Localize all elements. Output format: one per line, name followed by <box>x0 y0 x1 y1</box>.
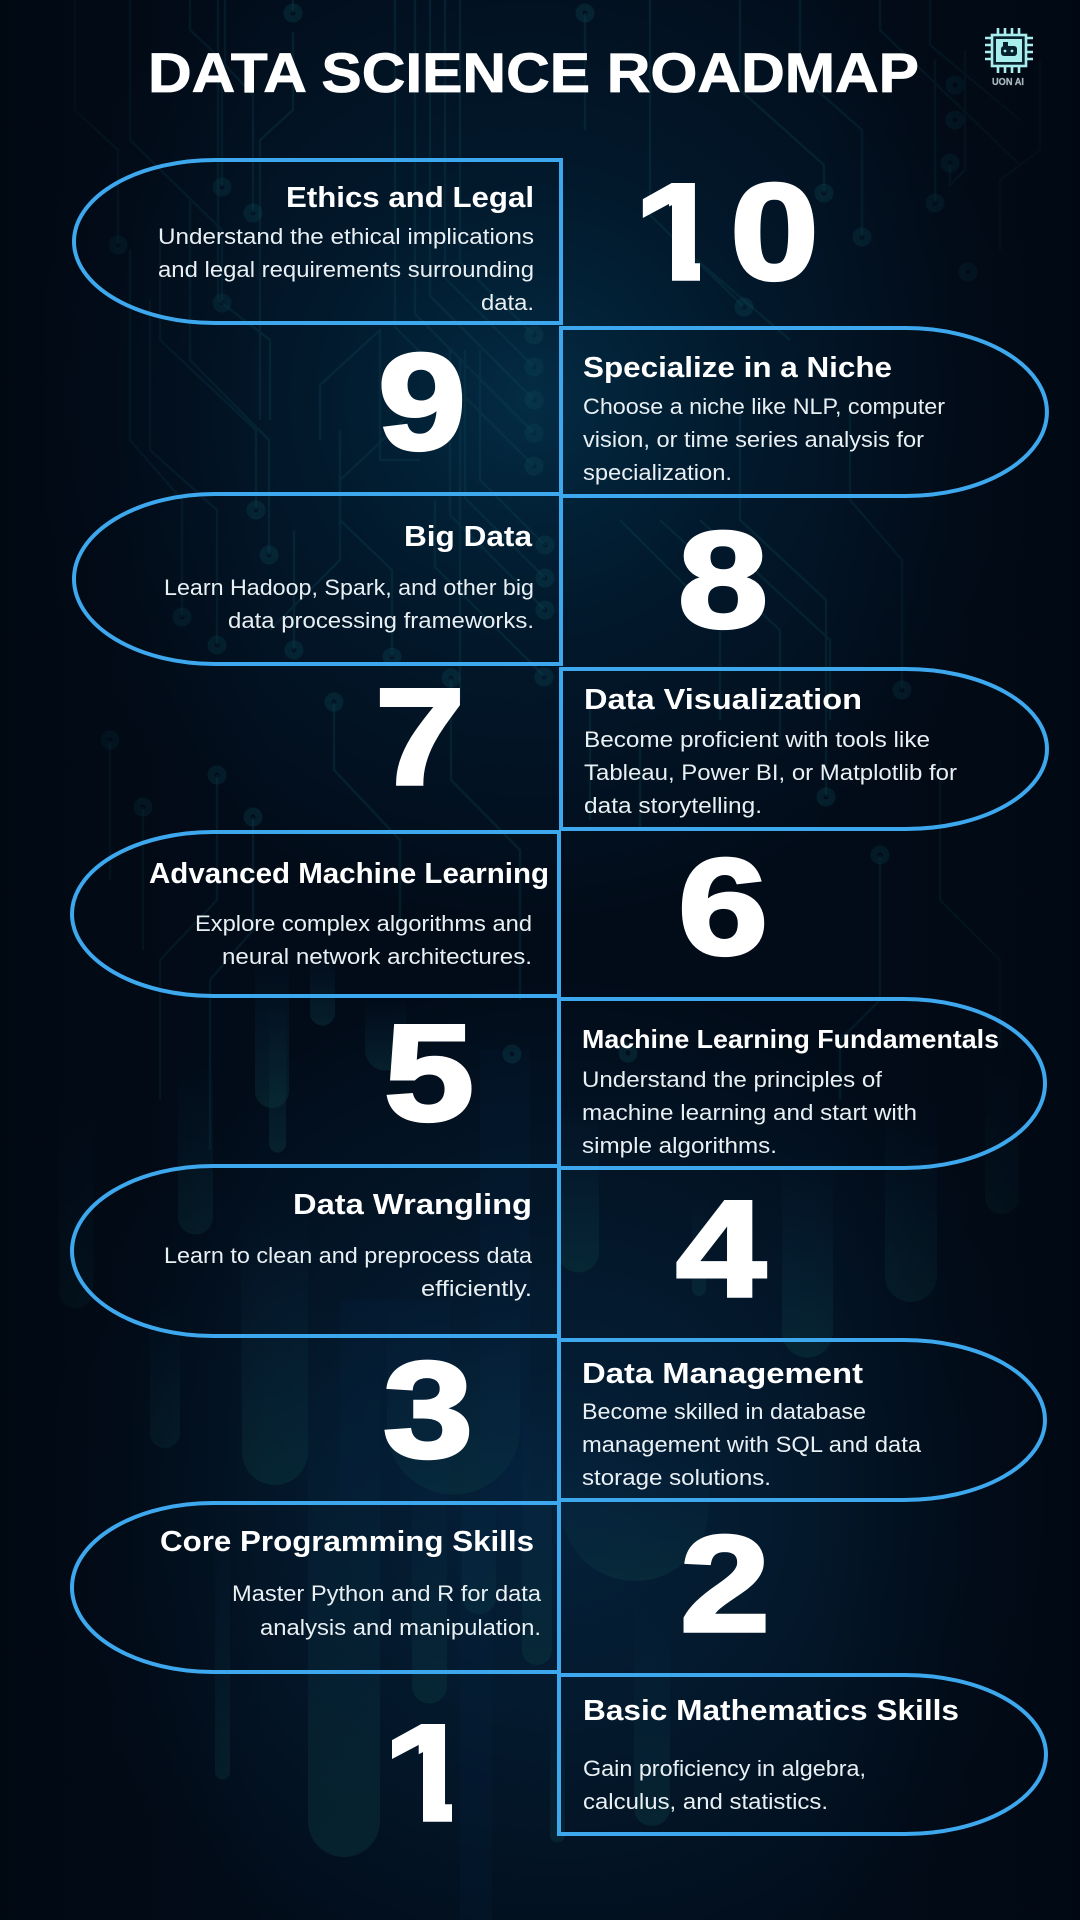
description: analysis and manipulation. <box>260 1615 541 1640</box>
heading: Data Wrangling <box>293 1189 532 1221</box>
description: vision, or time series analysis for <box>583 427 924 452</box>
heading: Basic Mathematics Skills <box>583 1695 959 1727</box>
number 10: 10 <box>634 156 819 309</box>
pill outline <box>72 1503 559 1672</box>
heading: Data Management <box>582 1358 863 1390</box>
description: Become proficient with tools like <box>584 727 930 752</box>
description <box>584 727 957 818</box>
description <box>232 1581 542 1640</box>
number 3: 3 <box>383 1334 473 1487</box>
pill outline <box>72 832 559 996</box>
description: machine learning and start with <box>582 1100 917 1125</box>
pill outline <box>72 1166 559 1336</box>
description: specialization. <box>583 460 732 485</box>
description <box>164 1243 533 1301</box>
description: Understand the ethical implications <box>158 224 534 249</box>
panel: step 5 machine learning fundamentals <box>559 999 1045 1168</box>
number 7: 7 <box>375 661 465 814</box>
description <box>582 1399 922 1490</box>
heading: Advanced Machine Learning <box>149 858 549 890</box>
description: Tableau, Power BI, or Matplotlib for <box>584 760 957 785</box>
description: Gain proficiency in algebra, <box>583 1756 866 1781</box>
description <box>164 575 534 633</box>
pill outline <box>561 328 1047 496</box>
description: Become skilled in database <box>582 1399 866 1424</box>
description: management with SQL and data <box>582 1432 922 1457</box>
description <box>195 911 532 969</box>
description: Master Python and R for data <box>232 1581 542 1606</box>
panel: step 10 ethics and legal <box>74 160 561 323</box>
title: DATA SCIENCE ROADMAP <box>148 41 919 104</box>
icon: UON AI chip logo: UON AI <box>992 77 1024 88</box>
panel: step 4 data wrangling <box>72 1166 559 1336</box>
number 4: 4 <box>676 1173 766 1326</box>
description <box>582 1067 917 1158</box>
number 8: 8 <box>678 504 768 657</box>
description: data processing frameworks. <box>228 608 534 633</box>
description: and legal requirements surrounding <box>158 257 534 282</box>
panel: step 8 big data <box>74 494 561 664</box>
number 2: 2 <box>680 1508 770 1661</box>
heading: Core Programming Skills <box>160 1526 534 1558</box>
description: calculus, and statistics. <box>583 1789 828 1814</box>
description: efficiently. <box>421 1276 532 1301</box>
number 1: 1 <box>383 1697 473 1850</box>
description: data storytelling. <box>584 793 762 818</box>
heading: Ethics and Legal <box>286 182 534 214</box>
heading: Data Visualization <box>584 684 862 716</box>
pill outline <box>74 160 561 323</box>
heading: Big Data <box>404 521 533 553</box>
heading: Specialize in a Niche <box>583 352 892 384</box>
pill outline <box>559 1340 1045 1500</box>
description: storage solutions. <box>582 1465 771 1490</box>
heading: Machine Learning Fundamentals <box>582 1024 999 1054</box>
pill outline <box>561 669 1047 829</box>
number 5: 5 <box>384 997 474 1150</box>
description <box>583 1756 866 1814</box>
pill outline <box>559 1675 1046 1834</box>
description: simple algorithms. <box>582 1133 777 1158</box>
panel: step 1 basic mathematics skills <box>559 1675 1046 1834</box>
description: data. <box>481 290 534 315</box>
panel: step 2 core programming skills <box>72 1503 559 1672</box>
panel: step 3 data management <box>559 1340 1045 1500</box>
panel: step 6 advanced machine learning <box>72 832 559 996</box>
panel: step 7 data visualization <box>561 669 1047 829</box>
panel: step 9 specialize in a niche <box>561 328 1047 496</box>
description: Choose a niche like NLP, computer <box>583 394 945 419</box>
pill outline <box>74 494 561 664</box>
description: neural network architectures. <box>222 944 532 969</box>
description: Understand the principles of <box>582 1067 883 1092</box>
description <box>583 394 945 485</box>
description: Learn to clean and preprocess data <box>164 1243 533 1268</box>
number 6: 6 <box>678 831 768 984</box>
description <box>158 224 534 315</box>
pill outline <box>559 999 1045 1168</box>
description: Learn Hadoop, Spark, and other big <box>164 575 534 600</box>
icon: UON AI chip logo <box>985 28 1033 88</box>
number 9: 9 <box>378 326 466 479</box>
description: Explore complex algorithms and <box>195 911 532 936</box>
